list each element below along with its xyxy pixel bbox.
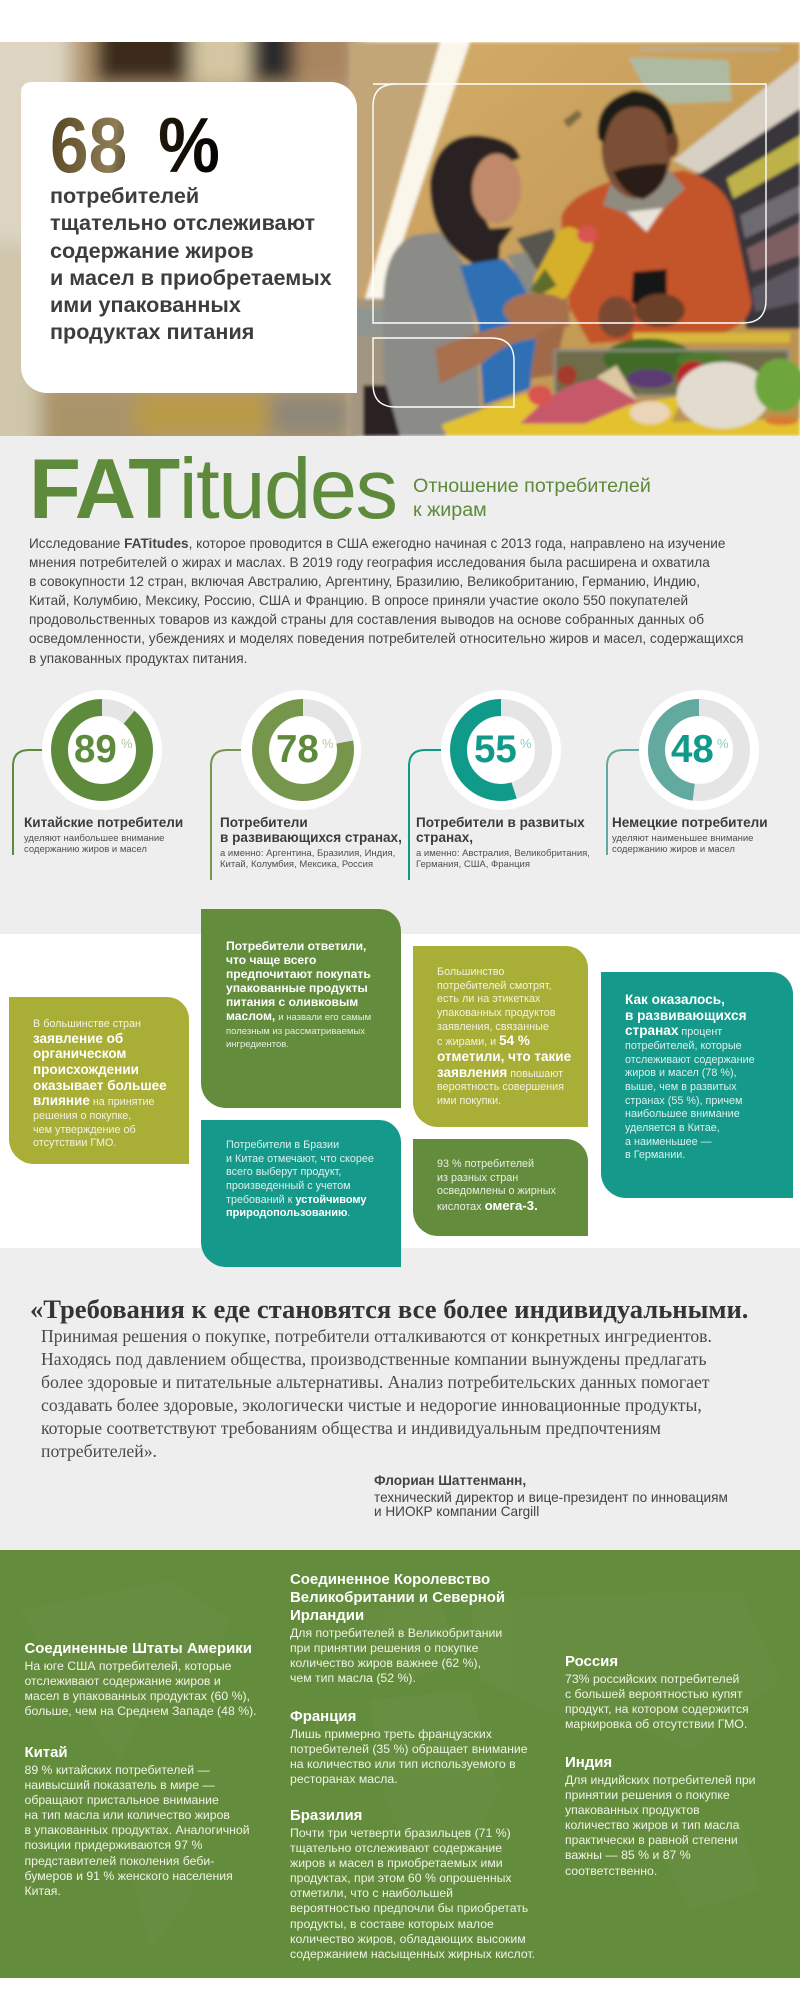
country: China: на тип масла или количество жиров <box>24 1808 230 1822</box>
card text: происхождении <box>33 1062 139 1077</box>
card text <box>437 1158 556 1213</box>
intro paragraph: мнения потребителей о жирах и маслах. В 2019 году география исследования была расширена и охватила <box>29 555 710 570</box>
stat: developed countries 55%: странах, <box>416 830 473 845</box>
stat description: потребителей <box>50 183 199 208</box>
card text: вероятность совершения <box>437 1081 564 1093</box>
intro paragraph <box>29 536 743 666</box>
country: United Kingdom: Соединенное Королевство <box>290 1571 490 1588</box>
card text: упакованных продуктов <box>437 1007 556 1019</box>
country: France: потребителей (35 %) обращает внимание <box>290 1742 528 1756</box>
country: Brazil: Почти три четверти бразильцев (71 %) <box>290 1826 511 1840</box>
stat: Chinese consumers 89%: Китайские потребители <box>24 815 183 830</box>
quote attribution: Флориан Шаттенманн, <box>374 1473 526 1488</box>
country: Brazil: Бразилия <box>290 1807 362 1824</box>
photo frame outline: small <box>373 338 514 407</box>
card text: кислотах омега-3. <box>437 1198 538 1213</box>
country: India: важны — 85 % и 87 % <box>565 1848 691 1862</box>
intro paragraph: в совокупности 12 стран, включая Австралию, Аргентину, Бразилию, Великобританию, Германию, Индию, <box>29 574 700 589</box>
photo: couple with shopping cart <box>350 42 800 436</box>
country: China: представителей поколения беби- <box>24 1854 214 1868</box>
card text: Как оказалось, <box>625 992 725 1007</box>
card text: заявление об <box>33 1031 123 1046</box>
stat: developed countries 55%: а именно: Австралия, Великобритания, <box>416 848 590 858</box>
card text: а наименьшее — <box>625 1136 712 1148</box>
country: India: Индия <box>565 1754 612 1771</box>
card text: уделяется в Китае, <box>625 1122 720 1134</box>
hero photo banner <box>0 42 800 436</box>
stat description: тщательно отслеживают <box>50 210 315 235</box>
card text: заявления повышают <box>437 1065 563 1080</box>
quote attribution: и НИОКР компании Cargill <box>374 1504 539 1519</box>
card text <box>33 1018 167 1149</box>
card text: отсутствии ГМО. <box>33 1137 116 1149</box>
card text: предпочитают покупать <box>226 967 371 981</box>
country: Brazil: тщательно отслеживают содержание <box>290 1841 502 1855</box>
intro paragraph: в упакованных продуктах питания. <box>29 651 247 666</box>
card text: наибольшее внимание <box>625 1108 740 1120</box>
card text: упакованные продукты <box>226 981 368 995</box>
country: USA: На юге США потребителей, которые <box>24 1659 231 1673</box>
country: USA <box>24 1640 257 1718</box>
country: USA: отслеживают содержание жиров и <box>24 1674 221 1688</box>
card text: и Китае отмечают, что скорее <box>226 1153 374 1165</box>
card: omega-3 <box>413 1139 588 1236</box>
card text: требований к устойчивому <box>226 1194 367 1206</box>
stat: German consumers 48%: Немецкие потребители <box>612 815 768 830</box>
stat: developed countries 55%: % <box>520 736 532 751</box>
country: Russia: маркировка об отсутствии ГМО. <box>565 1717 747 1731</box>
stat: German consumers 48% <box>606 690 768 855</box>
quote body: Находясь под давлением общества, производственные компании вынуждены предлагать <box>41 1349 706 1369</box>
title FATitudes: FATitudes <box>29 442 397 537</box>
country: China: Китай <box>24 1744 68 1761</box>
stat description: продуктах питания <box>50 319 254 344</box>
country: Russia: 73% российских потребителей <box>565 1672 739 1686</box>
country: China: 89 % китайских потребителей — <box>24 1763 210 1777</box>
photo frame outline: large <box>373 84 766 323</box>
country: United Kingdom: чем тип масла (52 %). <box>290 1671 416 1685</box>
card text: всего выберут продукт, <box>226 1166 341 1178</box>
country: India: упакованных продуктов <box>565 1803 700 1817</box>
card text: В большинстве стран <box>33 1018 141 1030</box>
stat description: содержание жиров <box>50 238 254 263</box>
grey background: intro section <box>0 436 800 934</box>
stat: Chinese consumers 89%: 89 <box>74 728 117 771</box>
stat description: ими упакованных <box>50 292 241 317</box>
country: Russia: продукт, на котором содержится <box>565 1702 749 1716</box>
card text: из разных стран <box>437 1172 518 1184</box>
stat: Chinese consumers 89%: содержанию жиров и масел <box>24 844 147 854</box>
country: China: Китая. <box>24 1884 61 1898</box>
stat: developing countries 78%: Китай, Колумбия, Мексика, Россия <box>220 858 373 870</box>
country: USA: Соединенные Штаты Америки <box>24 1640 252 1657</box>
country: USA: масел в упакованных продуктах (60 %), <box>24 1689 250 1703</box>
card text: есть ли на этикетках <box>437 993 540 1005</box>
big stat 68 %: 68 % <box>50 101 220 189</box>
faint world map <box>0 1550 800 1978</box>
stat: developed countries 55%: 55 <box>474 728 517 771</box>
stat: developed countries 55%: Германия, США, Франция <box>416 858 530 870</box>
country: China: обращают пристальное внимание <box>24 1793 219 1807</box>
card text: странах процент <box>625 1023 722 1038</box>
stat: Chinese consumers 89%: уделяют наибольшее внимание <box>24 832 164 844</box>
card text: оказывает большее <box>33 1078 167 1093</box>
card text: органическом <box>33 1046 126 1061</box>
stat: developing countries 78%: 78 <box>276 728 319 771</box>
hero white card <box>21 82 357 393</box>
stat description <box>50 183 332 344</box>
green background: countries panel <box>0 1550 800 1978</box>
quote body: потребителей». <box>41 1441 157 1461</box>
card text <box>226 1139 374 1219</box>
subtitle: к жирам <box>413 499 487 521</box>
card: developing countries tracking <box>601 972 793 1198</box>
card text: осведомлены о жирных <box>437 1185 556 1197</box>
stat: Chinese consumers 89%: % <box>121 736 133 751</box>
card text: природопользованию. <box>226 1207 350 1219</box>
stat: German consumers 48%: содержанию жиров и масел <box>612 844 735 854</box>
card text: в развивающихся <box>625 1008 747 1023</box>
country: China: бумеров и 91 % женского населения <box>24 1869 233 1883</box>
man <box>561 170 752 344</box>
stat: German consumers 48%: % <box>717 736 729 751</box>
quote body <box>41 1326 712 1461</box>
card: organic claims <box>9 997 189 1164</box>
country: France: на количество или тип используемого в <box>290 1757 516 1771</box>
card: Brazil and China sustainability <box>201 1120 401 1267</box>
stat: developing countries 78%: % <box>322 736 334 751</box>
woman <box>430 135 520 275</box>
card text: решения о покупке, <box>33 1110 131 1122</box>
stat: developing countries 78%: Потребители <box>220 815 308 830</box>
country: United Kingdom: Великобритании и Северной <box>290 1589 505 1606</box>
intro paragraph: Исследование FATitudes, которое проводится в США ежегодно начиная с 2013 года, направлено на изучение <box>29 536 725 551</box>
card text: что чаще всего <box>226 953 316 967</box>
card text: Большинство <box>437 966 504 978</box>
country: Brazil <box>290 1807 535 1961</box>
country: India <box>565 1754 756 1878</box>
card text: отметили, что такие <box>437 1049 571 1064</box>
card text: заявления, связанные <box>437 1021 549 1033</box>
quote heading: «Требования к еде становятся все более индивидуальными. <box>30 1294 748 1324</box>
country: France: ресторанах масла. <box>290 1772 398 1786</box>
country: Brazil: вероятностью предпочли бы приобретать <box>290 1901 528 1915</box>
country: United Kingdom: Для потребителей в Великобритании <box>290 1626 502 1640</box>
stat: developed countries 55% <box>408 690 590 880</box>
card text: с жирами, и 54 % <box>437 1033 530 1048</box>
quote body: более здоровые и питательные альтернативы. Анализ потребительских данных помогает <box>41 1372 710 1392</box>
country: Brazil: содержанием насыщенных жирных кислот. <box>290 1947 535 1961</box>
phone and hands <box>598 296 635 338</box>
country: Russia <box>565 1653 749 1731</box>
card text: ингредиентов. <box>226 1039 289 1050</box>
card text: выше, чем в развитых <box>625 1081 737 1093</box>
country: Brazil: продуктах, при этом 60 % опрошенных <box>290 1871 512 1885</box>
stat: developing countries 78%: а именно: Аргентина, Бразилия, Индия, <box>220 848 395 858</box>
intro paragraph: Китай, Колумбию, Мексику, Россию, США и Францию. В опросе приняли участие около 550 покупателей <box>29 593 688 608</box>
country: India: соответственно. <box>565 1864 657 1878</box>
stat: developing countries 78%: в развивающихся странах, <box>220 830 402 845</box>
quote attribution <box>374 1473 728 1519</box>
card text: 93 % потребителей <box>437 1158 534 1170</box>
country: India: практически в равной степени <box>565 1833 738 1847</box>
country: Russia: Россия <box>565 1653 618 1670</box>
card text: потребителей, которые <box>625 1040 742 1052</box>
country: China: в упакованных продуктах. Аналогичной <box>24 1823 250 1837</box>
photo: blurred store shelves <box>0 22 360 462</box>
card: label claims <box>413 946 588 1127</box>
intro paragraph: продовольственных товаров из каждой страны для составления выводов на основе собранных данных об <box>29 612 704 627</box>
country: United Kingdom: Ирландии <box>290 1607 364 1624</box>
quote body: которые соответствуют требованиям общества и индивидуальным предпочтениям <box>41 1418 661 1438</box>
card text <box>226 939 371 1050</box>
quote body: создавать более здоровые, экологически чистые и недорогие инновационные продукты, <box>41 1395 702 1415</box>
bottle <box>529 222 598 305</box>
grey background: quote section <box>0 1248 800 1550</box>
subtitle <box>413 475 651 521</box>
card text: влияние на принятие <box>33 1093 154 1108</box>
country: France: Лишь примерно треть французских <box>290 1727 492 1741</box>
country: Brazil: жиров и масел в приобретаемых ими <box>290 1856 503 1870</box>
country: Russia: с большей вероятностью купят <box>565 1687 743 1701</box>
card text: в Германии. <box>625 1149 685 1161</box>
card text: жиров и масел (78 %), <box>625 1067 737 1079</box>
intro paragraph: осведомленности, убеждениях и моделях поведения потребителей относительно жиров и масел, содержащихся <box>29 631 743 646</box>
quote body: Принимая решения о покупке, потребители отталкиваются от конкретных ингредиентов. <box>41 1326 712 1346</box>
country: United Kingdom <box>290 1571 505 1685</box>
card text: ими покупки. <box>437 1095 501 1107</box>
country: France <box>290 1708 528 1786</box>
card text: произведенный с учетом <box>226 1180 351 1192</box>
country: China <box>24 1744 250 1898</box>
country: USA: больше, чем на Среднем Западе (48 %). <box>24 1704 257 1718</box>
card text: полезным из рассматриваемых <box>226 1026 365 1037</box>
stat: German consumers 48%: уделяют наименьшее внимание <box>612 832 753 844</box>
country: United Kingdom: при принятии решения о покупке <box>290 1641 478 1655</box>
card text: Потребители ответили, <box>226 939 366 953</box>
card text: потребителей смотрят, <box>437 980 551 992</box>
card text: Потребители в Бразии <box>226 1139 339 1151</box>
stat: German consumers 48%: 48 <box>671 728 714 771</box>
country: India: количество жиров и тип масла <box>565 1818 739 1832</box>
card text: отслеживают содержание <box>625 1054 755 1066</box>
card: olive oil preference <box>201 909 401 1108</box>
country: China: позиции придерживаются 97 % <box>24 1838 202 1852</box>
country: Brazil: количество жиров, обладающих высоким <box>290 1932 526 1946</box>
card text <box>437 966 571 1107</box>
cart <box>633 333 790 343</box>
country: Brazil: продукты, в составе которых малое <box>290 1917 494 1931</box>
stat: Chinese consumers 89% <box>12 690 183 855</box>
quote attribution: технический директор и вице-президент по инновациям <box>374 1490 728 1505</box>
stat: developed countries 55%: Потребители в развитых <box>416 815 585 830</box>
stat: developing countries 78% <box>210 690 402 880</box>
country: India: принятии решения о покупке <box>565 1788 730 1802</box>
card text <box>625 992 755 1161</box>
country: Brazil: отметили, что с наибольшей <box>290 1886 453 1900</box>
card text: странах (55 %), причем <box>625 1095 742 1107</box>
country: India: Для индийских потребителей при <box>565 1773 756 1787</box>
country: China: наивысший показатель в мире — <box>24 1778 215 1792</box>
stat description: и масел в приобретаемых <box>50 265 332 290</box>
card text: питания с оливковым <box>226 995 358 1009</box>
card text: чем утверждение об <box>33 1124 136 1136</box>
subtitle: Отношение потребителей <box>413 475 651 497</box>
country: United Kingdom: количество жиров важнее (62 %), <box>290 1656 481 1670</box>
country: France: Франция <box>290 1708 356 1725</box>
card text: маслом, и назвали его самым <box>226 1009 371 1023</box>
